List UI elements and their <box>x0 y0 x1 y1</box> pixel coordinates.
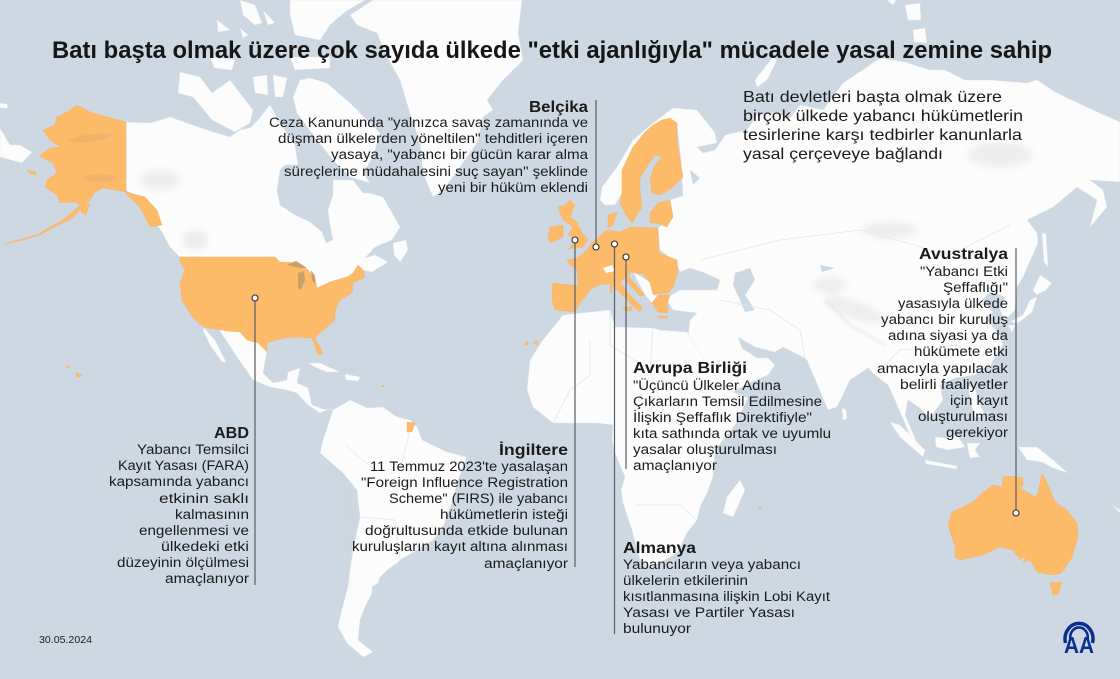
callout: Avustralya: yabancı bir kuruluş <box>881 312 1008 327</box>
callout: Avustralya: yasasıyla ülkede <box>898 296 1008 311</box>
icon: AA logo <box>1064 623 1094 658</box>
callout: Avustralya: adına siyasi ya da <box>888 328 1009 343</box>
land: South America <box>320 400 467 657</box>
callout: Almanya: kısıtlanmasına ilişkin Lobi Kayıt <box>623 589 830 604</box>
callout: Avustralya: hükümete etki <box>914 344 1008 359</box>
intro text: Batı devletleri başta olmak üzere <box>743 89 1002 106</box>
land: Caspian and inland seas <box>690 170 835 312</box>
orange: Great Lakes and Alaska range shading <box>68 131 315 290</box>
callout: Belçika: süreçlerine müdahalesini suç sayan" şeklinde <box>284 164 588 179</box>
callout: İngiltere: doğrultusunda etkide bulunan <box>365 523 568 538</box>
callout: ABD: ABD <box>214 425 249 442</box>
callout: Avrupa Birliği: kıta sathında ortak ve uyumlu <box>633 426 831 441</box>
callout: Avustralya: Avustralya <box>919 246 1008 263</box>
intro text: tesirlerine karşı tedbirler kanunlarla <box>743 127 1022 144</box>
callout: Avustralya <box>877 246 1019 516</box>
callout: Belçika: Ceza Kanununda "yalnızca savaş zamanında ve <box>269 115 588 130</box>
callout: Avustralya: "Yabancı Etki <box>920 264 1008 279</box>
callout: İngiltere: kuruluşların kayıt altına alınması <box>352 539 568 554</box>
callout: Belçika: düşman ülkelerden yöneltilen" tehditleri içeren <box>278 131 588 146</box>
callout: Avustralya: belirli faaliyetler <box>900 377 1009 392</box>
land: Arctic islands <box>178 0 380 183</box>
land: Africa <box>527 310 748 568</box>
terrain shading <box>140 143 1032 328</box>
title: Batı başta olmak üzere çok sayıda ülkede "etki ajanlığıyla" mücadele yasal zemine sahip <box>52 37 1052 64</box>
callout: ABD: ülkedeki etki <box>161 539 249 554</box>
callout: ABD: kalmasının <box>175 507 249 522</box>
callout: Almanya: Yasası ve Partiler Yasası <box>623 605 795 620</box>
callout: Avrupa Birliği: Çıkarların Temsil Edilmesine <box>633 394 822 409</box>
callout: ABD: Kayıt Yasası (FARA) <box>118 458 249 473</box>
callout: İngiltere: 11 Temmuz 2023'te yasalaşan <box>370 459 568 474</box>
callout: Belçika: Belçika <box>529 99 588 116</box>
callout: Avrupa Birliği <box>623 254 831 473</box>
callout: Avrupa Birliği: "Üçüncü Ülkeler Adına <box>633 378 782 393</box>
intro text <box>743 89 1023 163</box>
callout: ABD <box>109 295 258 586</box>
callout: ABD: Yabancı Temsilci <box>137 442 249 457</box>
callout: Belçika: yeni bir hüküm eklendi <box>438 180 588 195</box>
land: Japan and islands <box>0 103 1120 513</box>
callout: Avustralya: amacıyla yapılacak <box>877 361 1008 376</box>
callout: Avrupa Birliği: yasalar oluşturulması <box>633 442 777 457</box>
orange: European Union and United Kingdom <box>382 118 761 509</box>
intro text: birçok ülkede yabancı hükümetlerin <box>743 108 1023 125</box>
callout: Belçika: yasaya, "yabancı bir gücün karar alma <box>331 147 589 162</box>
callout: İngiltere: İngiltere <box>499 442 568 459</box>
callout: Avustralya: Şeffaflığı" <box>943 280 1008 295</box>
country borders <box>345 225 1010 560</box>
orange: Australia <box>948 473 1078 595</box>
callout: Belçika <box>269 99 599 250</box>
callout: ABD: amaçlanıyor <box>165 571 250 586</box>
callout: Almanya: Yabancıların veya yabancı <box>623 557 801 572</box>
callout: Avrupa Birliği: İlişkin Şeffaflık Direktifiyle" <box>633 410 812 425</box>
land: Madagascar <box>723 480 745 517</box>
land: North America <box>126 105 408 413</box>
callout: Avrupa Birliği: Avrupa Birliği <box>633 360 747 377</box>
land: Greenland <box>350 0 523 197</box>
callout: Almanya: Almanya <box>623 540 696 557</box>
land: Eurasia <box>600 0 1120 445</box>
intro text: yasal çerçeveye bağlandı <box>743 146 943 163</box>
callout: Almanya: bulunuyor <box>623 621 692 636</box>
callout: İngiltere: Scheme" (FIRS) ile yabancı <box>389 491 568 506</box>
callout: Almanya: ülkelerin etkilerinin <box>623 573 748 588</box>
icon: AA logo: AA <box>1064 632 1094 658</box>
callout: İngiltere: amaçlanıyor <box>484 556 569 571</box>
callout: ABD: engellenmesi ve <box>139 523 249 538</box>
Switzerland <box>603 265 615 273</box>
callout: Avustralya: için kayıt <box>950 393 1008 408</box>
callout: İngiltere: hükümetlerin isteği <box>440 507 568 522</box>
callout: İngiltere <box>352 237 578 571</box>
callout: ABD: düzeyinin ölçülmesi <box>117 555 249 570</box>
callout: Almanya <box>612 241 830 636</box>
callout: Avustralya: gerekiyor <box>946 425 1009 440</box>
orange: USA <box>5 105 365 377</box>
callout: ABD: etkinin saklı <box>159 491 249 506</box>
callout: Avrupa Birliği: amaçlanıyor <box>633 458 718 473</box>
callout: Avustralya: oluşturulması <box>918 409 1008 424</box>
callout: ABD: kapsamında yabancı <box>109 474 249 489</box>
date: 30.05.2024 <box>39 634 92 646</box>
callout: İngiltere: "Foreign Influence Registration <box>361 475 568 490</box>
